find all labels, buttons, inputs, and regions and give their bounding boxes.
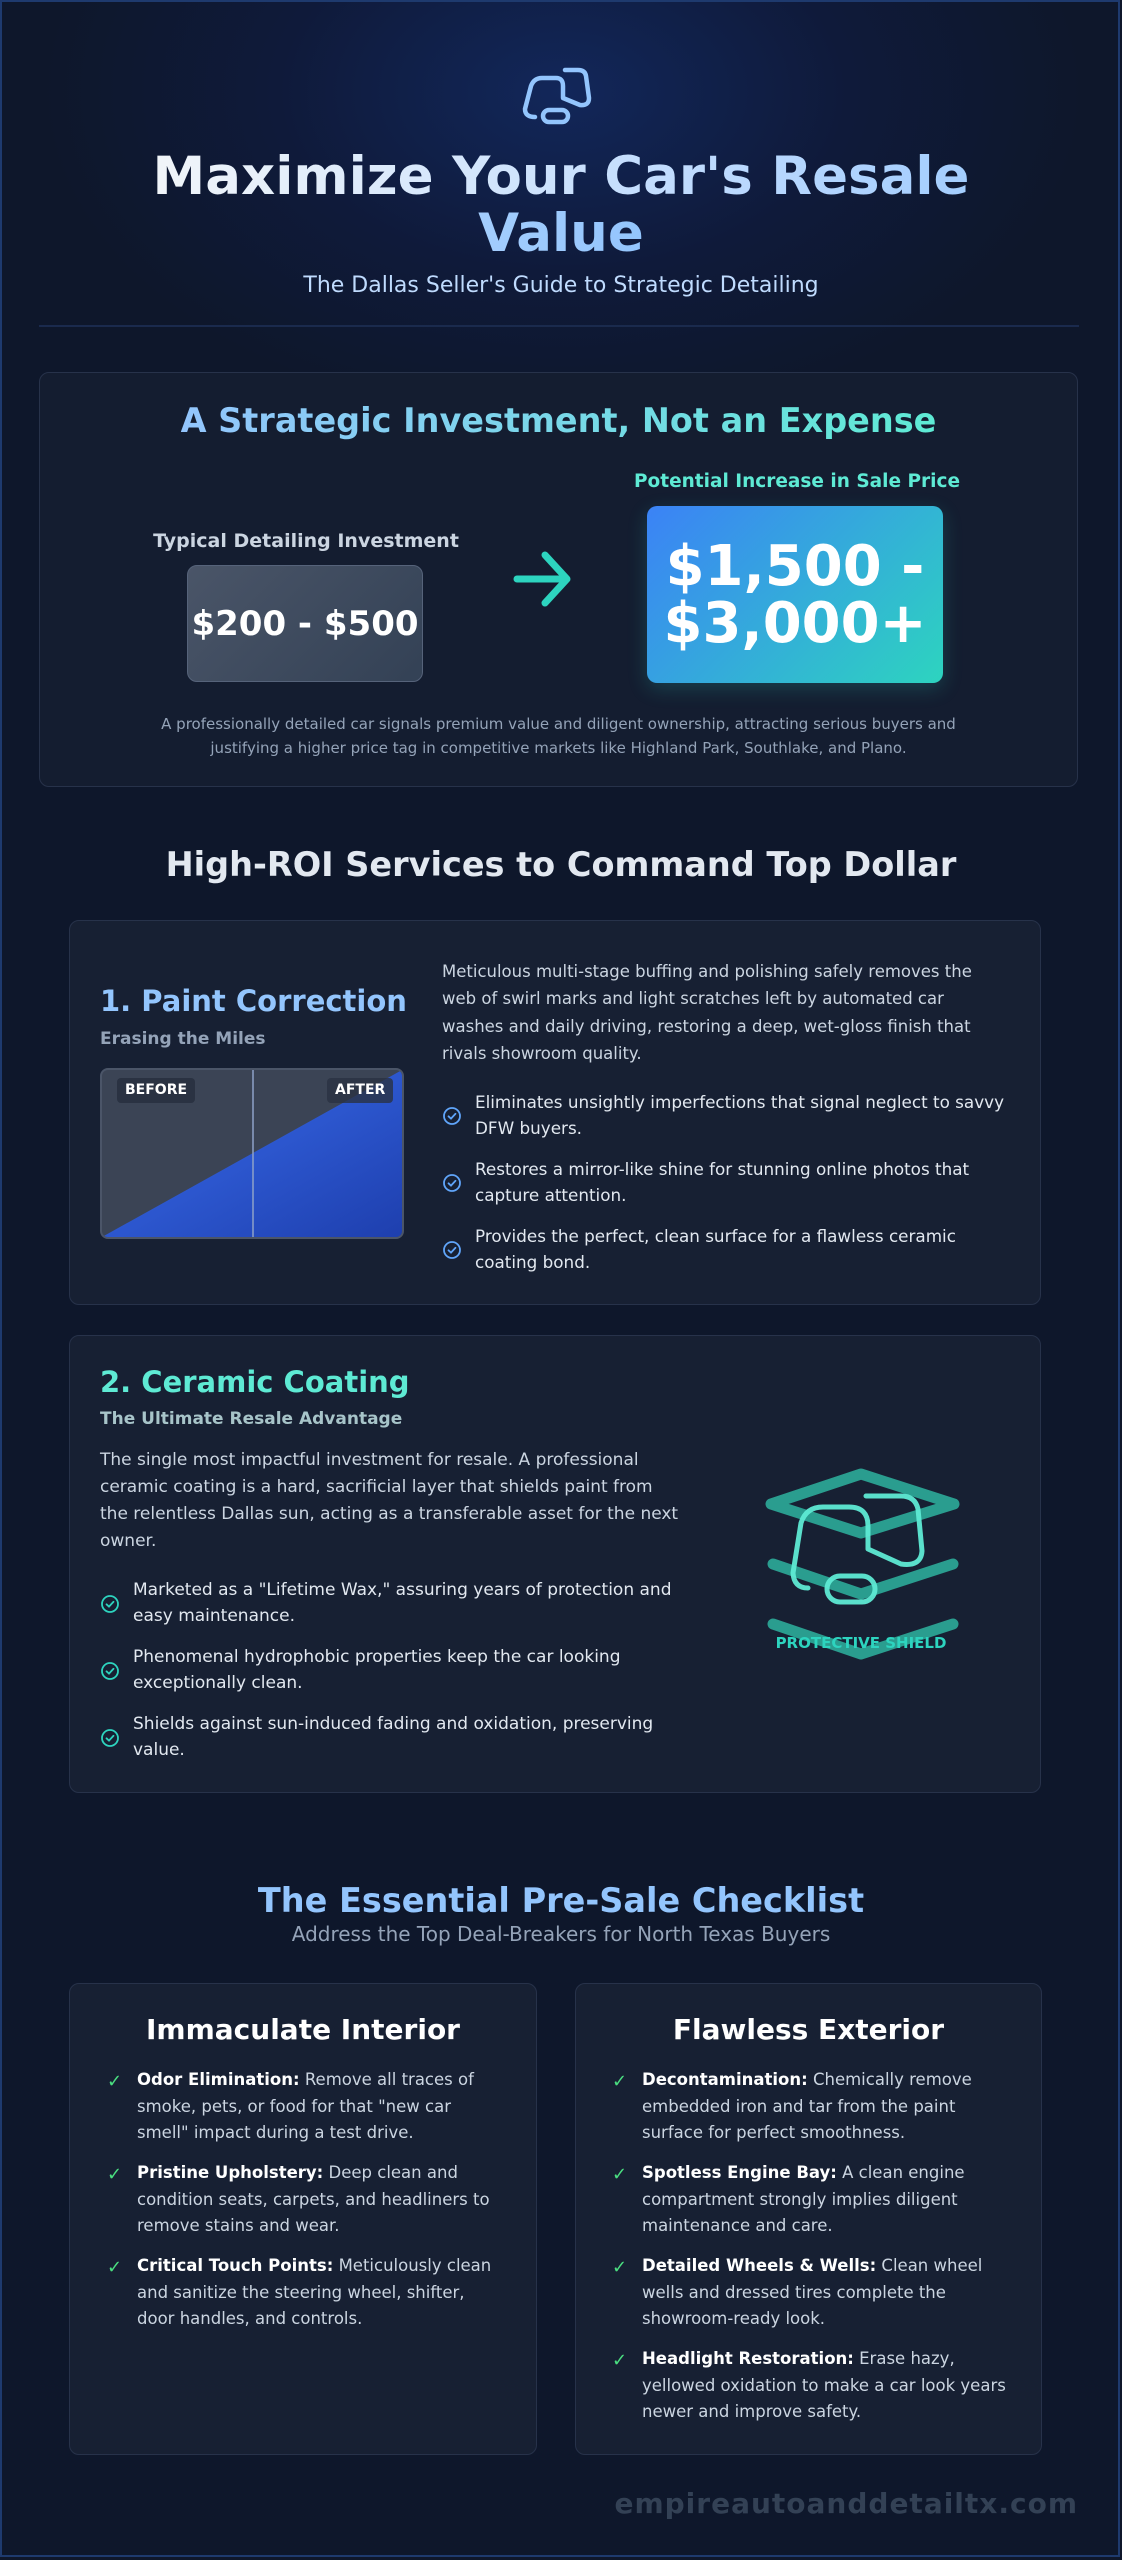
panel: exterior: ✓ (612, 2164, 627, 2185)
panel: exterior: ✓ (612, 2257, 627, 2278)
subheading: Erasing the Miles (100, 1029, 266, 1049)
footer: website: empireautoanddetailtx.com (614, 2487, 1078, 2520)
panel: exterior (575, 1983, 1042, 2455)
icon: protective shield (766, 1468, 960, 1660)
before/after visual (100, 1068, 404, 1239)
panel: interior: Pristine Upholstery: Deep clean and condition seats, carpets, and headliners to remove stains and wear. (137, 2163, 490, 2235)
panel: ceramic coating: Shields against sun-induced fading and oxidation, preserving value. (133, 1714, 653, 1760)
panel: paint correction: Eliminates unsightly imperfections that signal neglect to savvy DFW buyers. (475, 1092, 1004, 1138)
icon: protective shield: PROTECTIVE SHIELD (776, 1634, 946, 1652)
box: sale increase: $3,000+ (663, 590, 927, 656)
icon: car header (522, 68, 592, 124)
panel: exterior: Spotless Engine Bay: A clean engine compartment strongly implies diligent maintenance and care. (642, 2163, 965, 2235)
heading: 2. Ceramic Coating (100, 1365, 410, 1399)
before/after visual: BEFORE (125, 1082, 187, 1098)
panel: interior: Odor Elimination: Remove all traces of smoke, pets, or food for that "new car smell" impact during a test drive. (137, 2070, 474, 2142)
heading: Immaculate Interior (146, 2013, 460, 2046)
bullet list (443, 1092, 1004, 1272)
before/after visual: AFTER (335, 1082, 385, 1098)
bullet list (101, 1580, 671, 1760)
heading: A Strategic Investment, Not an Expense (181, 401, 936, 440)
panel: ceramic coating: Marketed as a "Lifetime Wax," assuring years of protection and easy maintenance. (133, 1580, 671, 1626)
panel: ceramic coating (69, 1335, 1041, 1793)
panel: interior (69, 1983, 537, 2455)
panel: paint correction: Provides the perfect, clean surface for a flawless ceramic coating bond. (475, 1226, 956, 1272)
panel: ceramic coating: Phenomenal hydrophobic properties keep the car looking exceptionally clean. (133, 1647, 620, 1693)
subheading: checklist: Address the Top Deal-Breakers for North Texas Buyers (292, 1922, 830, 1946)
panel: interior: ✓ (107, 2071, 122, 2092)
caption: A professionally detailed car signals premium value and diligent ownership, attracting serious buyers and justifying a higher price tag in competitive markets like Highland Park, Southlake, and Plano. (161, 715, 956, 757)
panel: exterior: Headlight Restoration: Erase hazy, yellowed oxidation to make a car look years newer and improve safety. (642, 2349, 1006, 2421)
panel: paint correction: Restores a mirror-like shine for stunning online photos that capture attention. (475, 1159, 969, 1205)
heading: high-roi services: High-ROI Services to Command Top Dollar (166, 845, 956, 884)
panel: exterior: ✓ (612, 2071, 627, 2092)
title: Value (478, 203, 644, 264)
panel: interior: ✓ (107, 2257, 122, 2278)
panel: paint correction (69, 920, 1041, 1305)
heading: checklist: The Essential Pre-Sale Checklist (258, 1881, 864, 1920)
title: Maximize Your Car's Resale (153, 146, 969, 207)
description: Meticulous multi-stage buffing and polishing safely removes the web of swirl marks and light scratches left by automated car washes and daily driving, restoring a deep, wet-gloss finish that rivals showroom quality. (442, 962, 972, 1063)
panel: strategic investment (39, 372, 1078, 787)
box: investment value (187, 565, 423, 682)
panel: interior: ✓ (107, 2164, 122, 2185)
subtitle: The Dallas Seller's Guide to Strategic Detailing (303, 273, 819, 298)
title (153, 146, 969, 264)
description: The single most impactful investment for resale. A professional ceramic coating is a hard, sacrificial layer that shields paint from the relentless Dallas sun, acting as a transferable asset for the next owner. (100, 1450, 678, 1551)
list (612, 2070, 1006, 2421)
box: investment value: $200 - $500 (191, 604, 419, 644)
label: potential increase: Potential Increase in Sale Price (634, 471, 960, 492)
panel: interior: Critical Touch Points: Meticulously clean and sanitize the steering wheel, shifter, door handles, and controls. (137, 2256, 491, 2328)
panel: exterior: Decontamination: Chemically remove embedded iron and tar from the paint surface for perfect smoothness. (642, 2070, 972, 2142)
list (107, 2070, 491, 2328)
heading: 1. Paint Correction (100, 984, 407, 1018)
panel: exterior: Detailed Wheels & Wells: Clean wheel wells and dressed tires complete the showroom-ready look. (642, 2256, 982, 2328)
label: typical investment: Typical Detailing Investment (153, 530, 459, 552)
heading: Flawless Exterior (673, 2013, 944, 2046)
panel: exterior: ✓ (612, 2350, 627, 2371)
box: sale increase: $1,500 - (666, 534, 924, 598)
subheading: The Ultimate Resale Advantage (100, 1409, 402, 1429)
box: sale increase (647, 506, 943, 683)
arrow (514, 552, 570, 606)
